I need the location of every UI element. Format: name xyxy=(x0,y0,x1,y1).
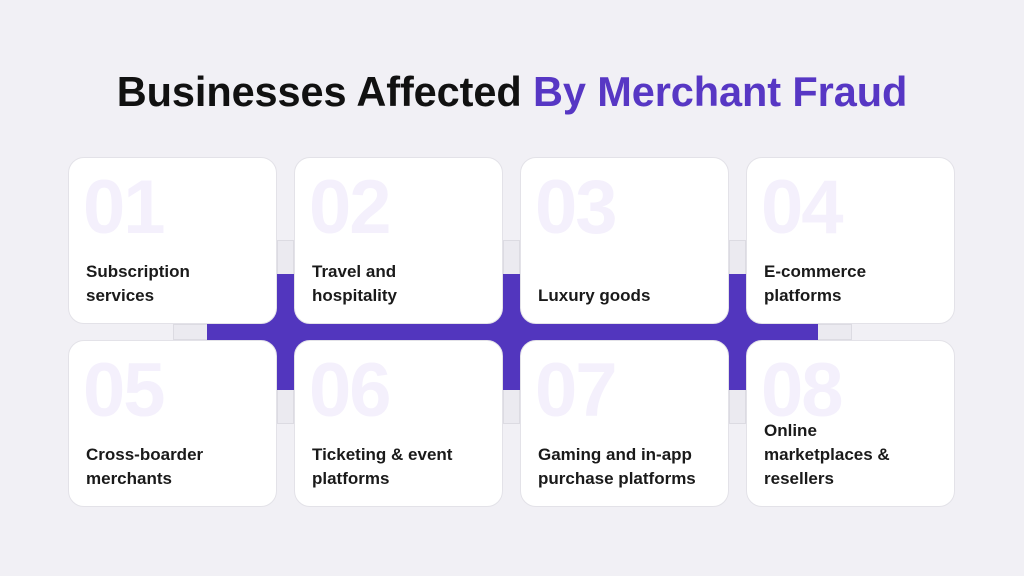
title: Businesses Affected By Merchant Fraud xyxy=(117,68,907,115)
card 02 xyxy=(294,157,503,324)
card 03 xyxy=(520,157,729,324)
card 05 xyxy=(68,340,277,507)
purple band xyxy=(207,274,818,390)
card 05: merchants xyxy=(86,469,172,488)
card 05: Cross-boarder xyxy=(86,445,203,464)
card 01 xyxy=(68,157,277,324)
card 01: services xyxy=(86,286,154,305)
card 02: Travel and xyxy=(312,262,396,281)
card 04: E-commerce xyxy=(764,262,866,281)
card 06: platforms xyxy=(312,469,389,488)
card 07: Gaming and in-app xyxy=(538,445,692,464)
card 06: Ticketing & event xyxy=(312,445,452,464)
card 07: 07 xyxy=(535,348,616,433)
card 08: 08 xyxy=(761,348,842,433)
card 01: 01 xyxy=(83,165,164,250)
card 02: hospitality xyxy=(312,286,397,305)
card 04: platforms xyxy=(764,286,841,305)
card 05: 05 xyxy=(83,348,164,433)
card 04: 04 xyxy=(761,165,842,250)
card 08: Online xyxy=(764,421,817,440)
card 07: purchase platforms xyxy=(538,469,696,488)
card 03: 03 xyxy=(535,165,616,250)
card 08 xyxy=(746,340,955,507)
card 06: 06 xyxy=(309,348,390,433)
card 01: Subscription xyxy=(86,262,190,281)
card 02: 02 xyxy=(309,165,390,250)
card 07 xyxy=(520,340,729,507)
card 03: Luxury goods xyxy=(538,286,650,305)
card 04 xyxy=(746,157,955,324)
card 06 xyxy=(294,340,503,507)
card 08: marketplaces & xyxy=(764,445,890,464)
card 08: resellers xyxy=(764,469,834,488)
connector lines xyxy=(173,240,852,424)
